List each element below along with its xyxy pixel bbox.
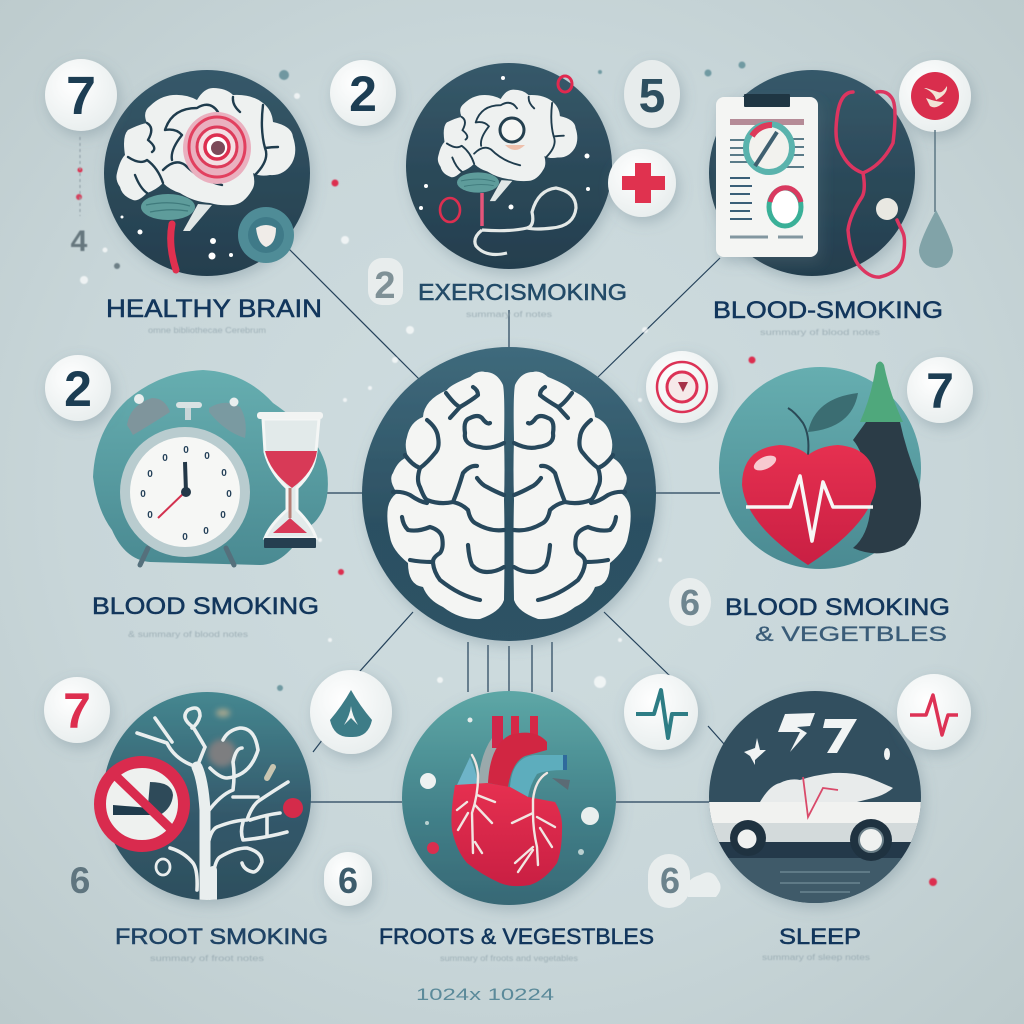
icon: hourglass bbox=[257, 412, 323, 548]
badge: 7 red bbox=[44, 677, 110, 743]
label: healthy brain: HEALTHY BRAIN bbox=[106, 295, 322, 323]
drop line bbox=[934, 130, 936, 212]
badge: 7 red: 7 bbox=[63, 683, 91, 739]
icon: white tree bbox=[137, 708, 288, 902]
label: blood smoking left: BLOOD SMOKING bbox=[92, 593, 319, 620]
circle backdrop bbox=[362, 347, 656, 641]
badge: 2 top: 2 bbox=[349, 66, 377, 122]
icon: leaf bbox=[788, 393, 858, 455]
badge: 7 top left: 7 bbox=[66, 66, 96, 126]
icon: pulse line bbox=[746, 476, 873, 541]
icon: clock feet bbox=[140, 548, 234, 565]
label: froots and vegetables: FROOTS & VEGESTBLES bbox=[379, 924, 654, 949]
apple highlight bbox=[752, 452, 778, 474]
icon: swirl bbox=[500, 118, 525, 150]
number: 6 bottom left: 6 bbox=[70, 860, 90, 901]
panel: top middle brain bbox=[406, 63, 612, 269]
caption: healthy brain: omne bibliothecae Cerebrum bbox=[148, 326, 266, 335]
caption: blood smoking left: & summary of blood notes bbox=[128, 630, 248, 639]
brain right hemisphere bbox=[514, 372, 631, 619]
brain speckles bbox=[120, 216, 233, 260]
smudges bbox=[208, 709, 236, 767]
badge: 7 right bbox=[907, 357, 973, 423]
caption: exercise smoking: summary of notes bbox=[466, 310, 552, 319]
icon: vehicle body bbox=[700, 802, 930, 858]
badge: leaf bbox=[899, 60, 971, 132]
icon: water drop bbox=[919, 210, 953, 268]
connector lines bbox=[288, 248, 724, 802]
circle backdrop bbox=[719, 367, 921, 569]
number badge: 2 mid bbox=[368, 258, 403, 307]
icon: small brain bbox=[438, 90, 577, 201]
icon: red ring bbox=[440, 198, 460, 222]
circle backdrop bbox=[104, 70, 310, 276]
icon: no-smoking sign bbox=[100, 762, 184, 846]
number badge: 2 mid: 2 bbox=[374, 265, 396, 307]
icon: spiral target bbox=[183, 112, 251, 184]
panel: clock bbox=[93, 370, 328, 567]
panel: heart apple bbox=[719, 362, 921, 569]
icon: clock face: 0 bbox=[162, 453, 168, 464]
number: 4: 4 bbox=[71, 225, 88, 258]
icon: stethoscope tube bbox=[475, 188, 576, 254]
icon: heart body bbox=[451, 783, 562, 886]
number: 6 right bbox=[669, 578, 711, 626]
icon: clock face: 0 bbox=[147, 510, 153, 521]
icon: stem bbox=[480, 193, 484, 226]
icon: clock bells bbox=[127, 394, 246, 438]
panel: sleep bbox=[700, 691, 930, 908]
icon: white arteries bbox=[457, 755, 555, 872]
icon: pulse mark bbox=[803, 777, 838, 817]
icon: clipboard bbox=[716, 94, 818, 257]
small pipe detail bbox=[552, 778, 570, 790]
icon: clock face: 0 bbox=[204, 451, 210, 462]
circle backdrop bbox=[402, 691, 616, 905]
badge: 6 bottom: 6 bbox=[338, 860, 358, 901]
badge: 2 top bbox=[330, 60, 396, 126]
caption: froots and vegetables: summary of froots and vegetables bbox=[440, 954, 578, 963]
label: exercise smoking: EXERCISMOKING bbox=[418, 279, 627, 305]
icon: clock face: 0 bbox=[226, 489, 232, 500]
icon: clock face: 0 bbox=[203, 526, 209, 537]
number: 6 right: 6 bbox=[680, 582, 700, 623]
icon: clock face: 0 bbox=[147, 469, 153, 480]
icon: red ring top bbox=[558, 76, 572, 92]
badge: drop mountain bbox=[310, 670, 392, 754]
badge: pulse red bbox=[897, 674, 971, 750]
icon: clock face: 0 bbox=[140, 489, 146, 500]
icon: brain stem bbox=[171, 224, 176, 270]
icon: wheel left bbox=[730, 820, 766, 856]
ground line bbox=[737, 566, 920, 568]
panel: healthy brain bbox=[104, 70, 310, 276]
panel: blood-smoking top right bbox=[709, 70, 915, 277]
label: vegetables line: & VEGETBLES bbox=[755, 623, 947, 646]
badge: pulse teal bbox=[624, 674, 698, 750]
icon: heart apple bbox=[742, 445, 876, 565]
badge: 2 left: 2 bbox=[64, 361, 92, 417]
icon: sleep symbols bbox=[744, 713, 890, 765]
brain left hemisphere bbox=[387, 372, 504, 619]
icon: clock face: 0 bbox=[182, 532, 188, 543]
panel: central brain bbox=[362, 347, 656, 641]
circle backdrop bbox=[406, 63, 612, 269]
icon: eggplant bbox=[853, 362, 921, 553]
icon: clock face: 0 bbox=[220, 510, 226, 521]
badge: 5 bbox=[624, 60, 680, 128]
badge: 7 top left bbox=[45, 59, 117, 131]
icon: red dot bbox=[283, 798, 303, 818]
speckles in circle bbox=[419, 76, 590, 210]
label: froot smoking: FROOT SMOKING bbox=[115, 924, 328, 949]
caption: blood-smoking: summary of blood notes bbox=[760, 328, 880, 337]
icon: heart vessels bbox=[457, 716, 567, 797]
badge: 6 with cloud: 6 bbox=[660, 860, 680, 901]
panel: no smoking bbox=[100, 692, 311, 902]
lower road bbox=[728, 858, 902, 903]
icon: teal lens bbox=[238, 207, 294, 263]
badge: 6 bottom bbox=[324, 852, 372, 906]
icon: chest piece bbox=[876, 198, 898, 220]
icon: wheel right bbox=[850, 819, 892, 861]
label: blood smoking vegetables: BLOOD SMOKING bbox=[725, 594, 950, 621]
road stripes bbox=[780, 872, 870, 892]
icon: clock face: 0 bbox=[221, 468, 227, 479]
icon: side brain bbox=[116, 88, 295, 231]
dimension note: 1024x 10224 bbox=[416, 985, 554, 1004]
caption: sleep: summary of sleep notes bbox=[762, 953, 870, 962]
heart speckles bbox=[420, 718, 599, 855]
icon: clock face bbox=[120, 427, 250, 557]
circle backdrop bbox=[709, 691, 921, 903]
label: blood-smoking: BLOOD-SMOKING bbox=[713, 297, 943, 324]
icon: pillow bbox=[760, 773, 893, 802]
teal blob backdrop bbox=[93, 370, 328, 565]
circle backdrop bbox=[103, 692, 311, 900]
circle backdrop bbox=[709, 70, 915, 276]
badge: 5: 5 bbox=[639, 70, 665, 123]
ground line bbox=[102, 566, 280, 568]
icon: clock face: 0 bbox=[183, 445, 189, 456]
label: sleep: SLEEP bbox=[779, 924, 861, 949]
decorative speckles bbox=[80, 93, 662, 688]
badge: 7 right: 7 bbox=[926, 363, 954, 419]
badge: 6 with cloud bbox=[648, 854, 721, 908]
badge: 2 left bbox=[45, 355, 111, 421]
panel: heart bbox=[402, 691, 616, 905]
caption: froot smoking: summary of froot notes bbox=[150, 954, 264, 963]
badge: target bbox=[646, 351, 718, 423]
badge: plus bbox=[608, 149, 676, 217]
icon: stethoscope bbox=[836, 92, 904, 277]
decorative coloured dots bbox=[76, 62, 937, 886]
